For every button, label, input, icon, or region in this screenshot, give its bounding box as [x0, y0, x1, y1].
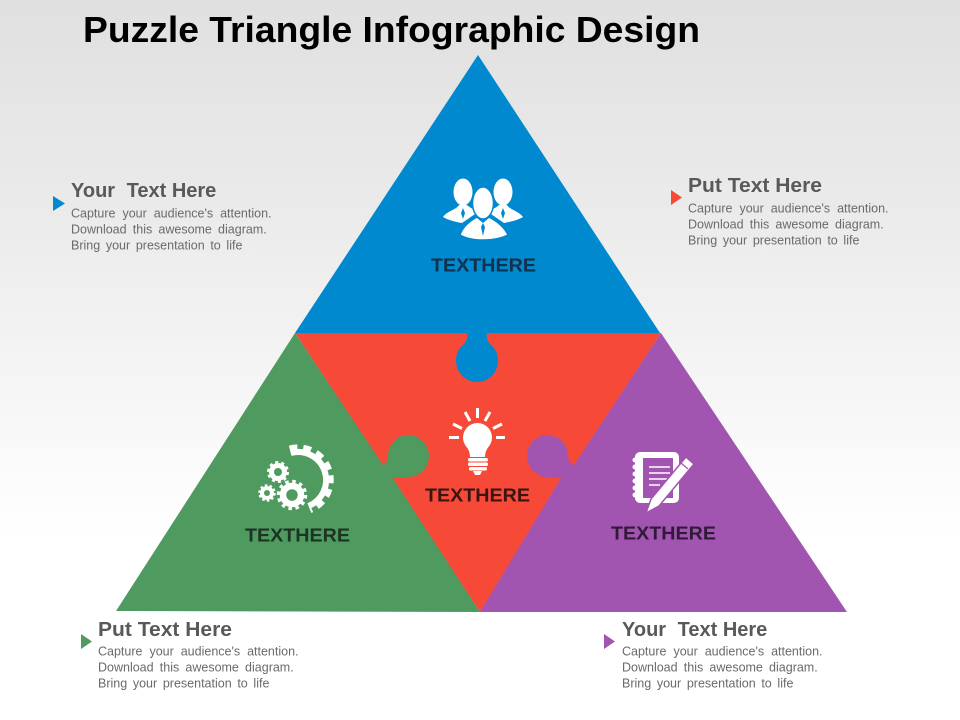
label: green piece: TEXTHERE — [245, 526, 350, 546]
panel: red centre puzzle piece — [295, 333, 661, 612]
panel: purple right puzzle piece — [480, 333, 847, 612]
label: blue piece: TEXTHERE — [431, 256, 536, 276]
callout text: Bring your presentation to life — [98, 676, 269, 690]
icon: people — [443, 178, 523, 240]
callout: bottom left — [81, 619, 299, 690]
callout text: Capture your audience's attention. — [71, 206, 272, 220]
label: red piece: TEXTHERE — [425, 486, 530, 506]
panel: green left puzzle piece — [116, 333, 480, 612]
callout text: Capture your audience's attention. — [622, 644, 823, 658]
callout heading: Your Text Here — [622, 619, 767, 641]
panel: blue top puzzle piece — [295, 55, 660, 382]
icon: blue arrow — [53, 196, 65, 211]
callout text: Download this awesome diagram. — [688, 218, 884, 232]
callout heading: Put Text Here — [98, 619, 232, 641]
callout text: Bring your presentation to life — [688, 234, 859, 248]
callout: top left — [53, 180, 272, 252]
icon: notebook and pen — [632, 452, 694, 513]
callout text: Download this awesome diagram. — [98, 660, 294, 674]
icon: light bulb — [449, 408, 505, 475]
icon: green arrow — [81, 634, 92, 649]
icon: red arrow — [671, 190, 682, 205]
callout text: Bring your presentation to life — [622, 676, 793, 690]
callout: top right — [671, 175, 889, 248]
icon: purple arrow — [604, 634, 615, 649]
callout text: Download this awesome diagram. — [622, 660, 818, 674]
title: Puzzle Triangle Infographic Design — [83, 9, 700, 50]
callout text: Capture your audience's attention. — [98, 644, 299, 658]
callout text: Capture your audience's attention. — [688, 202, 889, 216]
callout text: Download this awesome diagram. — [71, 222, 267, 236]
callout heading: Your Text Here — [71, 180, 216, 202]
icon: gears — [260, 447, 331, 511]
label: purple piece: TEXTHERE — [611, 524, 716, 544]
callout heading: Put Text Here — [688, 175, 822, 197]
callout: bottom right — [604, 619, 823, 690]
callout text: Bring your presentation to life — [71, 238, 242, 252]
